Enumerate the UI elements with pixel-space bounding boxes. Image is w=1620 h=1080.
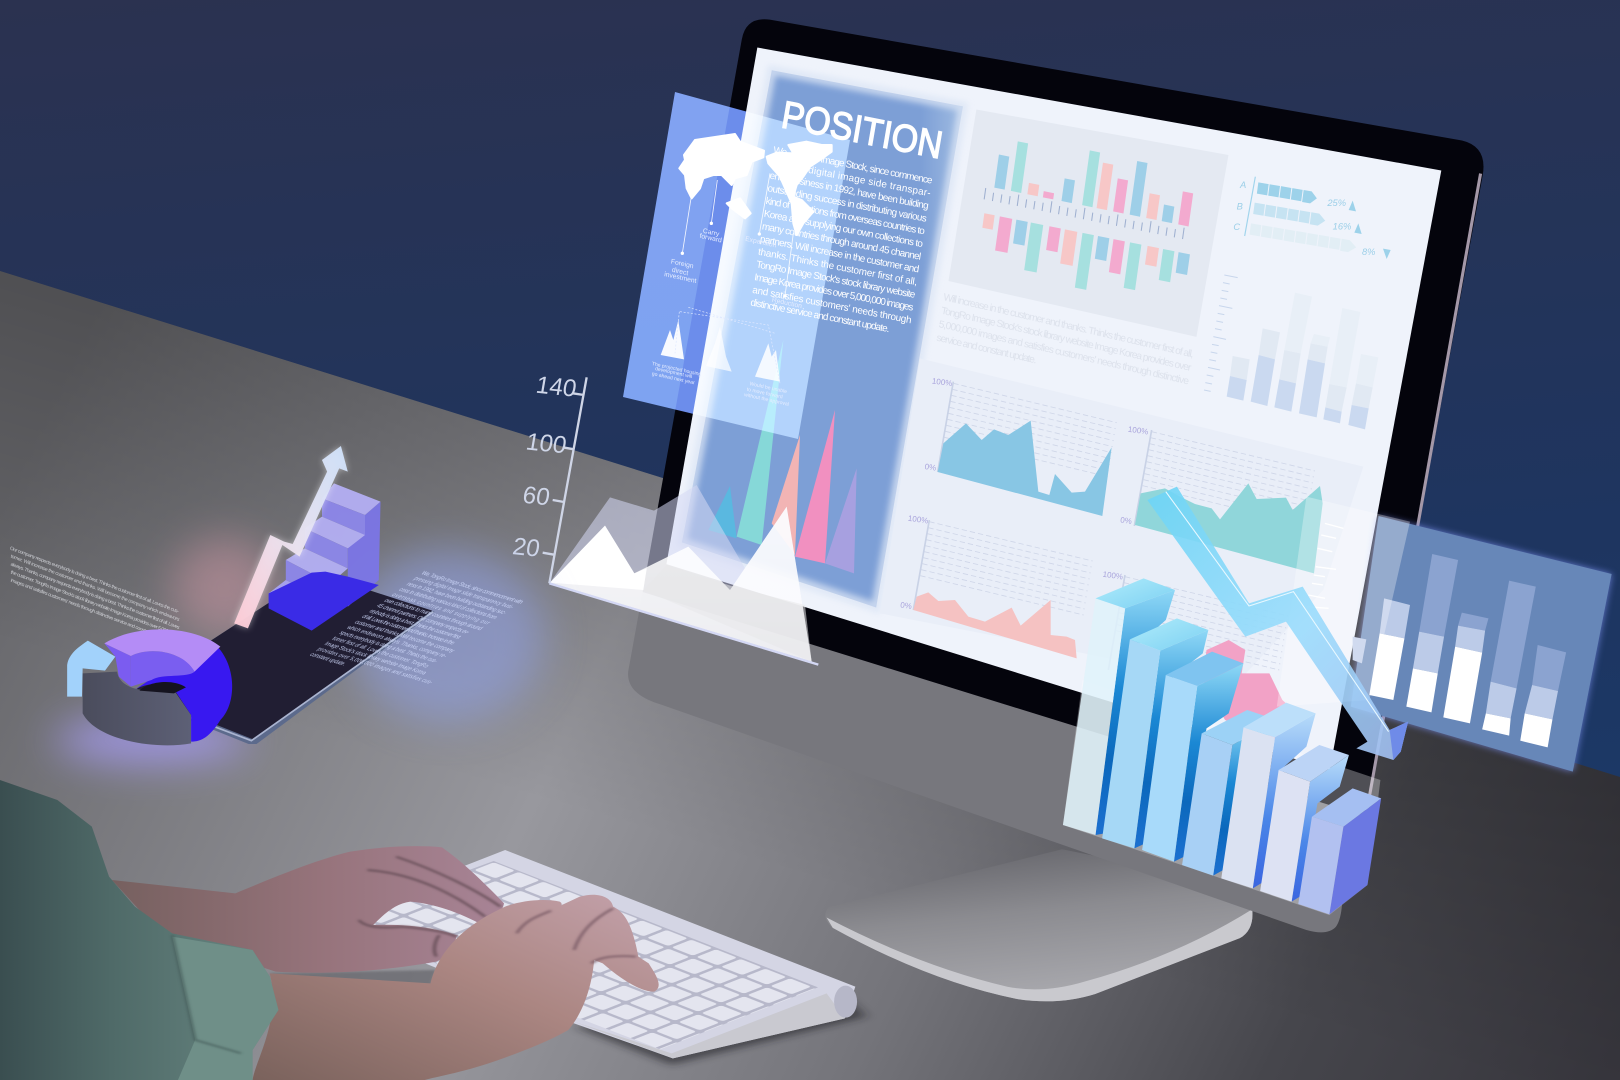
map labels: Foreign bbox=[670, 258, 694, 270]
left caption text: tomer. Will increase the customer and thanks. Will become the company which endeavors bbox=[10, 554, 181, 623]
mirrored bar chart bbox=[975, 131, 1201, 309]
map labels: investment bbox=[664, 271, 697, 285]
front mountain bbox=[550, 507, 812, 662]
map labels: forward bbox=[699, 233, 722, 245]
chart: teal area bbox=[1120, 425, 1323, 573]
body text in blue column: We, TongRo Image Stock, since commence bbox=[773, 145, 934, 187]
monitor bezel bbox=[643, 19, 1484, 816]
back hand bbox=[112, 846, 504, 973]
map labels: Would be unable bbox=[749, 381, 787, 395]
body text in blue column: ment of digital image side transpar- bbox=[771, 158, 931, 199]
map labels: to move forward bbox=[746, 387, 783, 401]
right caption text: 45 channel partners. Our company respects ev- bbox=[374, 603, 472, 636]
right caption text: erybody is doing a best. Thinks the customer first bbox=[367, 608, 463, 640]
faint paragraph below chart: TongRo Image Stock's stock library website Image Korea provides over bbox=[940, 306, 1193, 374]
faint paragraph below chart bbox=[936, 292, 1195, 401]
legend bars A B C: 25% bbox=[1326, 198, 1346, 208]
legend bars A B C: B bbox=[1237, 201, 1243, 211]
right caption text: own collections to many countries through around bbox=[382, 598, 485, 632]
body text in blue column: many countries through around 45 channel bbox=[761, 221, 922, 263]
right caption text: Image Stock's stock library website Image Korea bbox=[322, 641, 429, 676]
right caption text: overseas countries and supplying our bbox=[389, 592, 492, 626]
chart: teal area: 100% bbox=[1127, 425, 1149, 436]
bar 5 bbox=[1221, 703, 1316, 888]
faint paragraph below chart: 5,000,000 images and satisfies customers' needs through distinctive bbox=[938, 319, 1190, 388]
baseline bbox=[549, 583, 818, 665]
right caption text: of all. Loves the customer and thanks. Increase in the bbox=[359, 614, 457, 646]
bar 4 bbox=[1182, 710, 1277, 876]
right caption text bbox=[307, 570, 525, 686]
triangle chart in blue column bbox=[708, 340, 857, 573]
body text in blue column: Korea and supplying our own collections to bbox=[763, 209, 924, 250]
screen bbox=[666, 48, 1441, 770]
body text in blue column: kind of collections from overseas countries to bbox=[765, 196, 926, 238]
right caption text: ness in 1992, have been building outstanding suc- bbox=[404, 581, 508, 616]
axis labels bbox=[511, 372, 579, 563]
panel: top bar chart bbox=[948, 110, 1228, 337]
body text in blue column: ency business in 1992, have been building bbox=[769, 171, 929, 212]
body text in blue column: thanks. Thinks the customer first of all, bbox=[757, 247, 918, 288]
stacked bar chart right bbox=[1204, 275, 1378, 429]
body text in blue column bbox=[750, 145, 934, 339]
bar 6 bbox=[1260, 745, 1349, 902]
axis chart: mountains and scale bbox=[511, 372, 818, 665]
right caption text: cess in distributing various kind of collections from bbox=[397, 587, 499, 621]
monitor chin bbox=[628, 592, 1366, 932]
y axis bbox=[543, 377, 587, 583]
monitor bbox=[628, 19, 1484, 1001]
body text in blue column: TongRo Image Stock's stock library website bbox=[755, 259, 916, 301]
map labels: Reduction bbox=[771, 297, 803, 310]
chart: salmon area bbox=[900, 514, 1093, 658]
legend bars A B C bbox=[1233, 177, 1391, 259]
glow: pink and blue bbox=[55, 537, 544, 763]
right caption text: which endeavors always. Thanks, company re- bbox=[344, 624, 449, 659]
back mountain bbox=[550, 485, 812, 662]
chart: blue area: 0% bbox=[924, 462, 937, 473]
left caption text: Our company respects everybody is doing a best. Thinks the customer first of all. Loves the cus- bbox=[9, 546, 180, 615]
tablet device bbox=[131, 573, 435, 744]
panel: right translucent bar chart bbox=[1351, 516, 1612, 772]
axis labels: 140 bbox=[534, 372, 579, 403]
front hand bbox=[253, 895, 659, 1080]
map labels: Expansion bbox=[745, 236, 777, 250]
chart: pink area axis bbox=[1102, 570, 1288, 670]
arrow: falling trend bbox=[1147, 487, 1408, 760]
faint paragraph below chart: service and constant update. bbox=[936, 333, 1037, 366]
left caption text: always. Thanks, company respects everybody is doing a best. Thinks the customer first of all. Loves bbox=[10, 562, 181, 631]
bar 3 bbox=[1142, 652, 1244, 862]
bar 1 bbox=[1063, 578, 1175, 835]
monitor stand bbox=[825, 849, 1256, 1001]
right caption text: pressing digital image slide transparency busi- bbox=[411, 576, 516, 610]
heading: POSITION: POSITION bbox=[778, 94, 946, 168]
map labels: Carry bbox=[702, 228, 720, 238]
legend bars A B C: C bbox=[1233, 222, 1240, 232]
bar 7 bbox=[1298, 788, 1381, 914]
hands bbox=[0, 780, 659, 1080]
axis labels: 60 bbox=[521, 482, 552, 511]
chart: salmon area: 100% bbox=[907, 514, 929, 525]
chart: pink area bbox=[1203, 640, 1290, 740]
stair base over tablet bbox=[269, 572, 379, 631]
bar 2 bbox=[1102, 618, 1208, 848]
right caption text: spects everybody is doing a best. Thinks the cus- bbox=[337, 630, 440, 664]
map labels bbox=[651, 228, 803, 408]
overlay: right white ticks bbox=[1277, 497, 1410, 707]
map labels: without the approval bbox=[744, 392, 789, 408]
panel: area charts bbox=[880, 358, 1363, 683]
world map bbox=[661, 134, 832, 383]
3D bar chart bbox=[1063, 578, 1381, 915]
tablet scene bbox=[9, 446, 544, 763]
chart: blue area: 100% bbox=[931, 376, 953, 388]
body text in blue column: and satisfies customers' needs through bbox=[752, 285, 912, 326]
body text in blue column: outstanding success in distributing various bbox=[767, 183, 927, 225]
chart: salmon area: 0% bbox=[900, 600, 912, 611]
right caption text: tomer first of all. Loves the customer. TongRo bbox=[330, 636, 431, 669]
body text in blue column: distinctive service and constant update. bbox=[750, 298, 890, 335]
blue column panel bbox=[682, 70, 963, 608]
right caption text: We, TongRo Image Stock, since commencement with bbox=[419, 570, 525, 606]
stair bars bbox=[269, 483, 381, 620]
hand shadow bbox=[270, 970, 436, 987]
axis labels: 20 bbox=[511, 533, 542, 563]
chart: blue area bbox=[924, 376, 1117, 516]
keyboard bbox=[321, 850, 867, 1065]
chart: teal area: 0% bbox=[1120, 515, 1132, 526]
left caption text: the customer. TongRo Image Stock's stock library website Image Korea provides over 5,000,000 bbox=[10, 570, 177, 638]
panel: translucent world map bbox=[623, 92, 850, 439]
left caption text: images and satisfies customers' needs through distinctive service and constant update. bbox=[10, 578, 166, 642]
right caption text: constant update. bbox=[307, 652, 348, 667]
donut chart bbox=[67, 629, 232, 745]
legend bars A B C: A bbox=[1239, 180, 1246, 190]
body text in blue column: partners. Will increase in the customer and bbox=[759, 234, 920, 276]
chart: pink area axis: 100% bbox=[1102, 570, 1124, 581]
bars bbox=[1353, 554, 1566, 747]
translucent backing plate bbox=[1063, 680, 1380, 915]
body text in blue column: Image Korea provides over 5,000,000 images bbox=[754, 272, 914, 314]
faint paragraph below chart: Will increase in the customer and thanks. Thinks the customer first of all, bbox=[943, 292, 1194, 360]
right caption text: customer and thanks. Will become the company bbox=[352, 619, 457, 654]
right caption text: provides over 5,000,000 images and satisfies cus- bbox=[315, 646, 435, 686]
legend bars A B C: 8% bbox=[1362, 247, 1375, 257]
map labels: direct bbox=[671, 267, 689, 277]
arrow: rising trend bbox=[234, 446, 348, 628]
axis labels: 100 bbox=[524, 429, 569, 459]
monitor silver edge bbox=[1366, 174, 1481, 816]
desk surface bbox=[0, 271, 1620, 1080]
map labels: The projected housing bbox=[651, 361, 702, 378]
map labels: development will bbox=[655, 366, 692, 380]
shirt sleeve bbox=[0, 780, 278, 1080]
legend bars A B C: 16% bbox=[1333, 221, 1351, 231]
map labels: go ahead next year bbox=[651, 371, 695, 386]
